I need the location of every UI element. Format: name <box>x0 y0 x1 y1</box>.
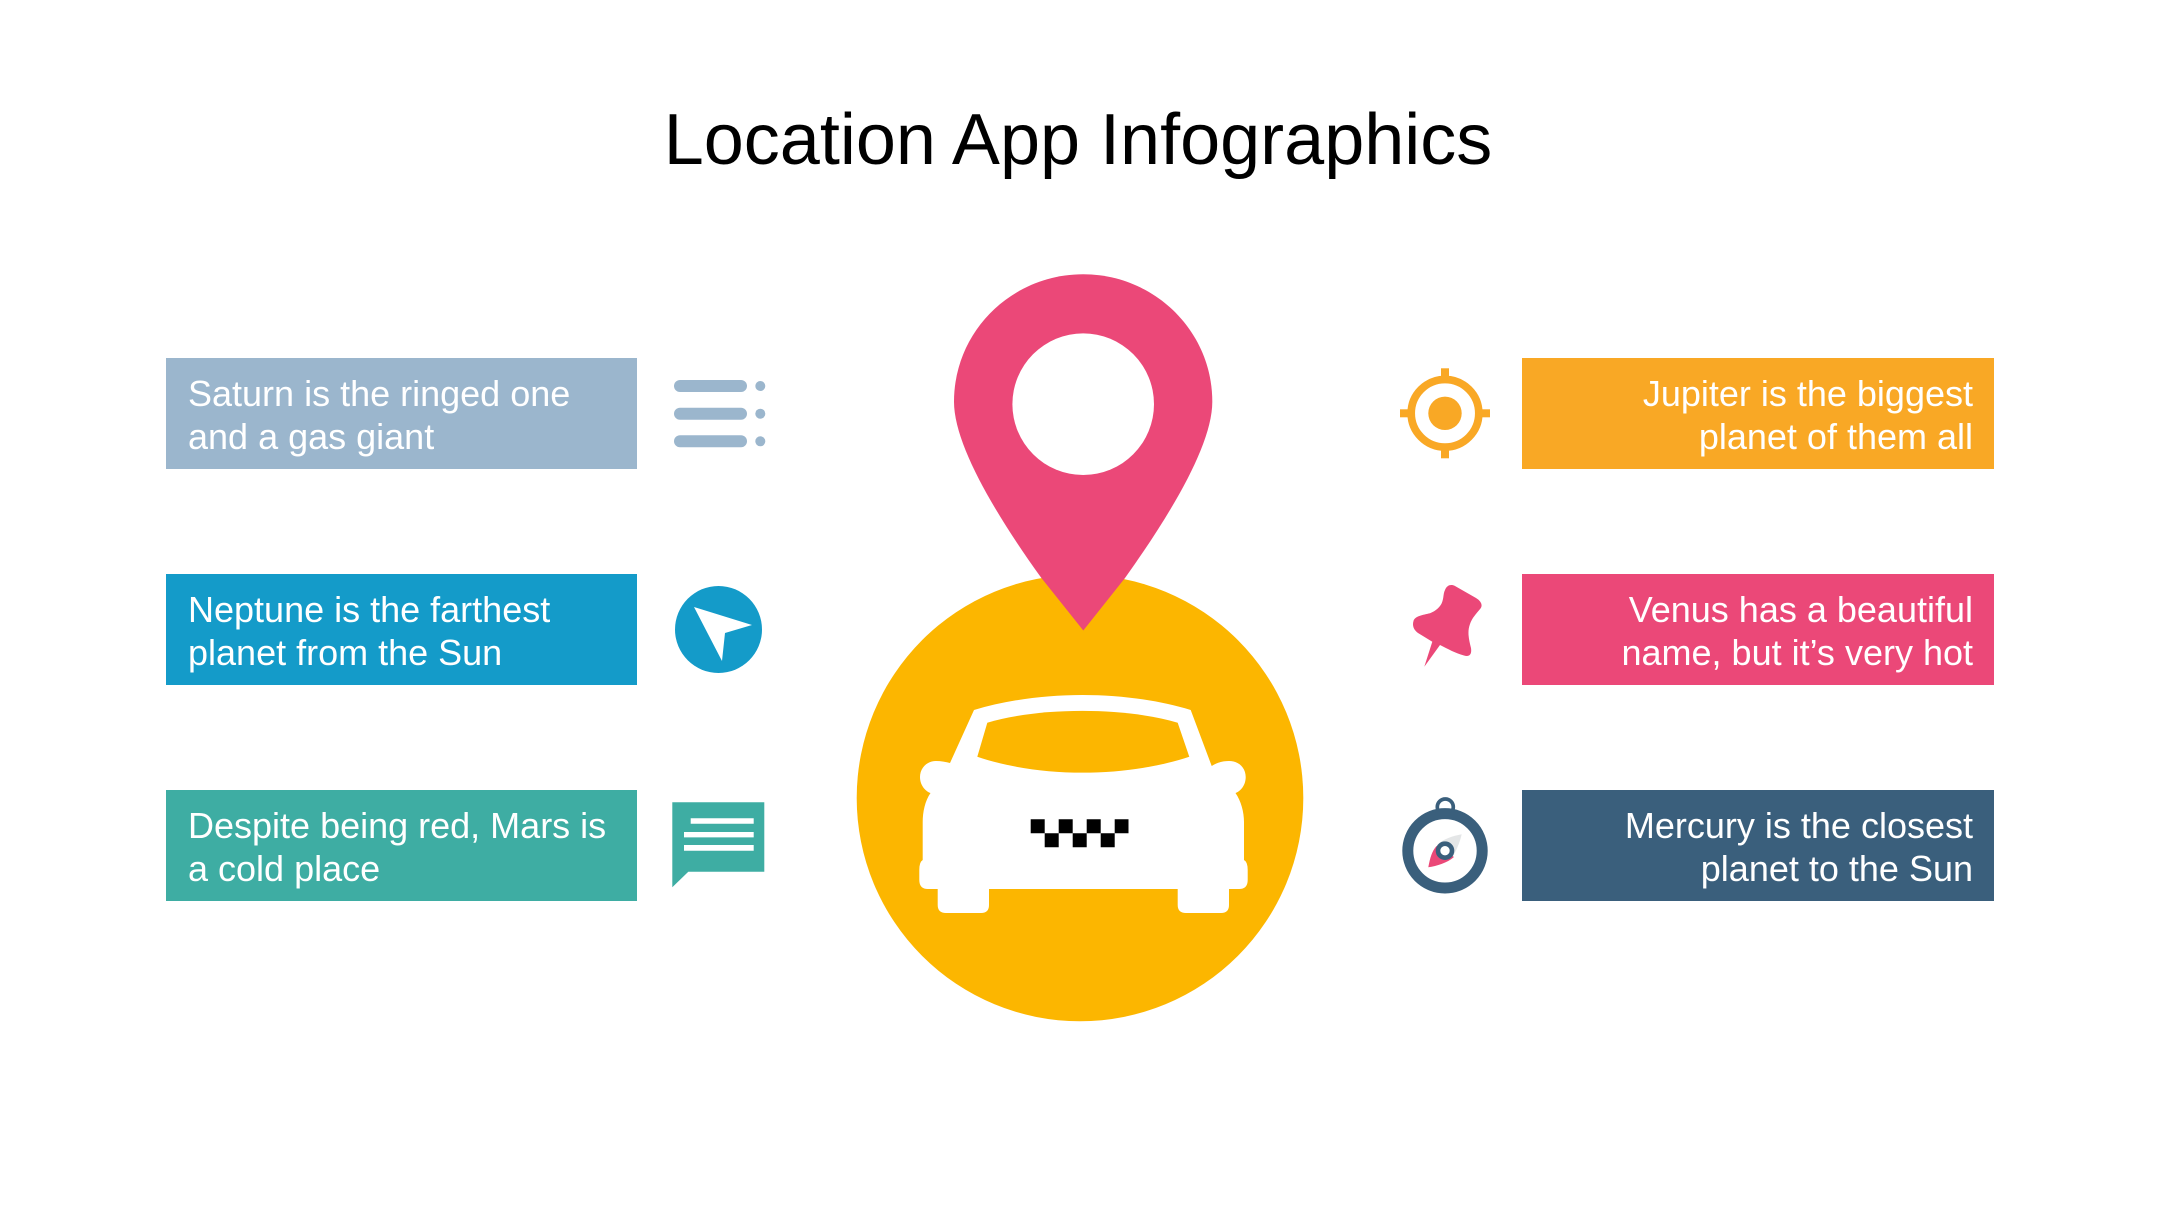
panel: Mars: a cold place <box>188 848 380 889</box>
icon: taxi car <box>919 695 1248 913</box>
panel: Venus: Venus has a beautiful <box>1629 588 1973 630</box>
panel: Mercury <box>1522 790 1994 901</box>
icon: target <box>1400 368 1490 458</box>
panel: Saturn: Saturn is the ringed one <box>188 372 570 414</box>
panel: Jupiter: Jupiter is the biggest <box>1643 372 1973 414</box>
panel: Neptune: planet from the Sun <box>188 632 502 673</box>
icon: menu list <box>674 380 765 447</box>
panel: Neptune <box>166 574 637 685</box>
icon: compass <box>1408 799 1482 888</box>
panel: Mars <box>166 790 637 901</box>
icon: chat bubble <box>672 802 764 887</box>
panel: Venus: name, but it’s very hot <box>1621 632 1973 673</box>
icon: navigation arrow <box>675 586 762 673</box>
panel: Mercury: Mercury is the closest <box>1625 804 1973 846</box>
yellow circle <box>857 575 1303 1021</box>
icon: location pin <box>954 274 1212 630</box>
checker pattern <box>1031 819 1128 847</box>
title: Location App Infographics <box>664 100 1492 180</box>
panel: Saturn: and a gas giant <box>188 416 434 457</box>
panel: Saturn <box>166 358 637 469</box>
panel: Jupiter <box>1522 358 1994 469</box>
icon: push pin <box>1413 585 1482 667</box>
panel: Mars: Despite being red, Mars is <box>188 804 606 846</box>
panel: Jupiter: planet of them all <box>1699 416 1973 457</box>
panel: Mercury: planet to the Sun <box>1701 848 1973 889</box>
panel: Venus <box>1522 574 1994 685</box>
panel: Neptune: Neptune is the farthest <box>188 588 550 630</box>
